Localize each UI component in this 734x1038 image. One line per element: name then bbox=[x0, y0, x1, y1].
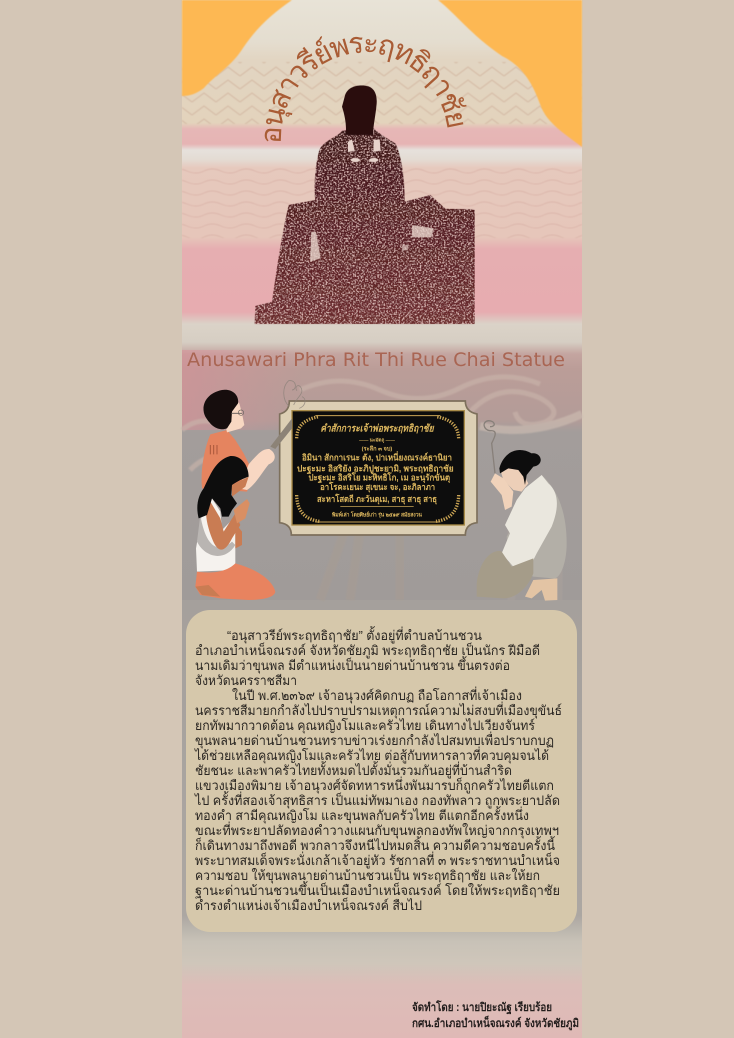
figure: man in orange shirt bbox=[202, 390, 292, 492]
history paragraphs: ก็เดินทางมาถึงพอดี พวกลาวจึงหนีไปหมดสิ้น ความดีความชอบครั้งนี้ bbox=[195, 836, 555, 853]
plaque inscription: คำสักการะเจ้าพ่อพระฤทธิฤาชัย bbox=[320, 423, 435, 435]
plaque black panel bbox=[292, 411, 464, 525]
plaque inscription: อาโรคะเยนะ สุเขนะ จะ, อะภิลาภา bbox=[320, 481, 435, 493]
history paragraphs: แขวงเมืองพิมาย เจ้าอนุวงศ์จัดทหารหนึ่งพันมารบก็ถูกครัวไทยตีแตก bbox=[195, 776, 554, 794]
icon: incense smoke left bbox=[284, 381, 305, 408]
plaque inscription bbox=[297, 423, 454, 518]
plaque inscription: (ระลึก ๓ จบ) bbox=[362, 445, 392, 452]
statue garland bbox=[310, 139, 434, 262]
statue body and base bbox=[255, 128, 475, 324]
history paragraphs: อำเภอบำเหน็จณรงค์ จังหวัดชัยภูมิ พระฤทธิฤาชัย เป็นนักร ฝีมือดี bbox=[195, 641, 540, 659]
plaque inscription: พิมพ์เล่า โดยศิษย์เก่า รุ่น ๒๕๑๙ สมัยสงวน bbox=[332, 510, 422, 518]
history paragraphs: ในปี พ.ศ.๒๓๖๙ เจ้าอนุวงศ์คิดกบฏ ถือโอกาสที่เจ้าเมือง bbox=[232, 686, 522, 704]
plaque inscription: —— นะมัตถุ —— bbox=[359, 436, 395, 443]
history paragraphs: นามเดิมว่าขุนพล มีตำแหน่งเป็นนายด่านบ้านชวน ขึ้นตรงต่อ bbox=[195, 656, 510, 674]
curved Thai title: อนุสาวรีย์พระฤทธิฤาชัย bbox=[264, 36, 467, 142]
credit text bbox=[412, 999, 579, 1031]
decorative orange blob corners bbox=[182, 0, 582, 147]
history paragraphs: ดำรงตำแหน่งเจ้าเมืองบำเหน็จณรงค์ สืบไป bbox=[195, 896, 422, 913]
English subtitle: Anusawari Phra Rit Thi Rue Chai Statue bbox=[187, 349, 565, 371]
history paragraphs bbox=[194, 626, 562, 913]
statue head bbox=[342, 85, 377, 135]
history paragraphs: จังหวัดนครราชสีมา bbox=[195, 673, 297, 688]
plaque inscription: สะหาโสตถี ภะวันตุเม, สาธุ สาธุ สาธุ bbox=[317, 493, 437, 505]
incense bundle bbox=[270, 418, 292, 449]
plaque inscription: ปะฐะมะ อิสริโย มะหิทธิโก, เม อะนุรักขันตุ bbox=[308, 472, 450, 484]
history paragraphs: พระบาทสมเด็จพระนั่งเกล้าเจ้าอยู่หัว รัชกาลที่ ๓ พระราชทานบำเหน็จ bbox=[195, 851, 560, 869]
background photo: temple wall bbox=[182, 0, 582, 1038]
credit text: จัดทำโดย : นายปิยะณัฐ เรียบร้อย bbox=[412, 999, 552, 1015]
history paragraphs: ทองคำ สามีคุณหญิงโม และขุนพลกับครัวไทย ตีแตกอีกครั้งหนึ่ง bbox=[195, 806, 529, 824]
plaque frame bbox=[280, 401, 477, 535]
history paragraphs: นครราชสีมายกกำลังไปปราบปรามเหตุการณ์ความไม่สงบที่เมืองขุขันธ์ bbox=[195, 701, 562, 719]
figure: kneeling girl bbox=[195, 456, 275, 600]
history paragraphs: ได้ช่วยเหลือคุณหญิงโมและครัวไทย ต่อสู้กับทหารลาวที่ควบคุมจนได้ bbox=[194, 746, 549, 764]
plaque inscription: ปะฐะมะ อิสริยัง อะภิปูชะยามิ, พระฤทธิฤาชัย bbox=[297, 464, 454, 475]
history paragraphs: ฐานะด่านบ้านชวนขึ้นเป็นเมืองบำเหน็จณรงค์ โดยให้พระฤทธิฤาชัย bbox=[195, 881, 560, 899]
history paragraphs: ขุนพลนายด่านบ้านชวนทราบข่าวเร่งยกกำลังไปสมทบเพื่อปราบกบฏ bbox=[195, 731, 554, 749]
history paragraphs: ความชอบ ให้ขุนพลนายด่านบ้านชวนเป็น พระฤทธิฤาชัย และให้ยก bbox=[195, 866, 540, 884]
illustration: plaque bbox=[280, 381, 477, 535]
history paragraphs: ยกทัพมากวาดต้อน คุณหญิงโมและครัวไทย เดินทางไปเวียงจันทร์ bbox=[195, 718, 535, 734]
credit text: กศน.อำเภอบำเหน็จณรงค์ จังหวัดชัยภูมิ bbox=[412, 1015, 579, 1031]
incense stick and smoke bbox=[484, 421, 495, 473]
plaque gold border bbox=[297, 416, 459, 522]
history paragraphs: ไป ครั้งที่สองเจ้าสุทธิสาร เป็นแม่ทัพมาเอง กองทัพลาว ถูกพระยาปลัด bbox=[194, 791, 560, 809]
figure: kneeling woman with incense bbox=[477, 421, 567, 601]
history paragraphs: ชัยชนะ และพาครัวไทยทั้งหมดไปตั้งมั่นรวมกันอยู่ที่บ้านสำริด bbox=[195, 761, 512, 779]
history paragraphs: ขณะที่พระยาปลัดทองคำวางแผนกับขุนพลกองทัพใหญ่จากกรุงเทพฯ bbox=[195, 821, 559, 839]
history paragraphs: “อนุสาวรีย์พระฤทธิฤาชัย” ตั้งอยู่ที่ตำบลบ้านชวน bbox=[227, 626, 482, 644]
statue of Phra Rit Thi Rue Chai bbox=[255, 85, 475, 324]
plaque inscription: อิมินา สักกาเรนะ ตัง, ปาเหนี่ยงณรงค์ธานิยา bbox=[301, 451, 452, 463]
panel: history text card bbox=[186, 610, 577, 932]
